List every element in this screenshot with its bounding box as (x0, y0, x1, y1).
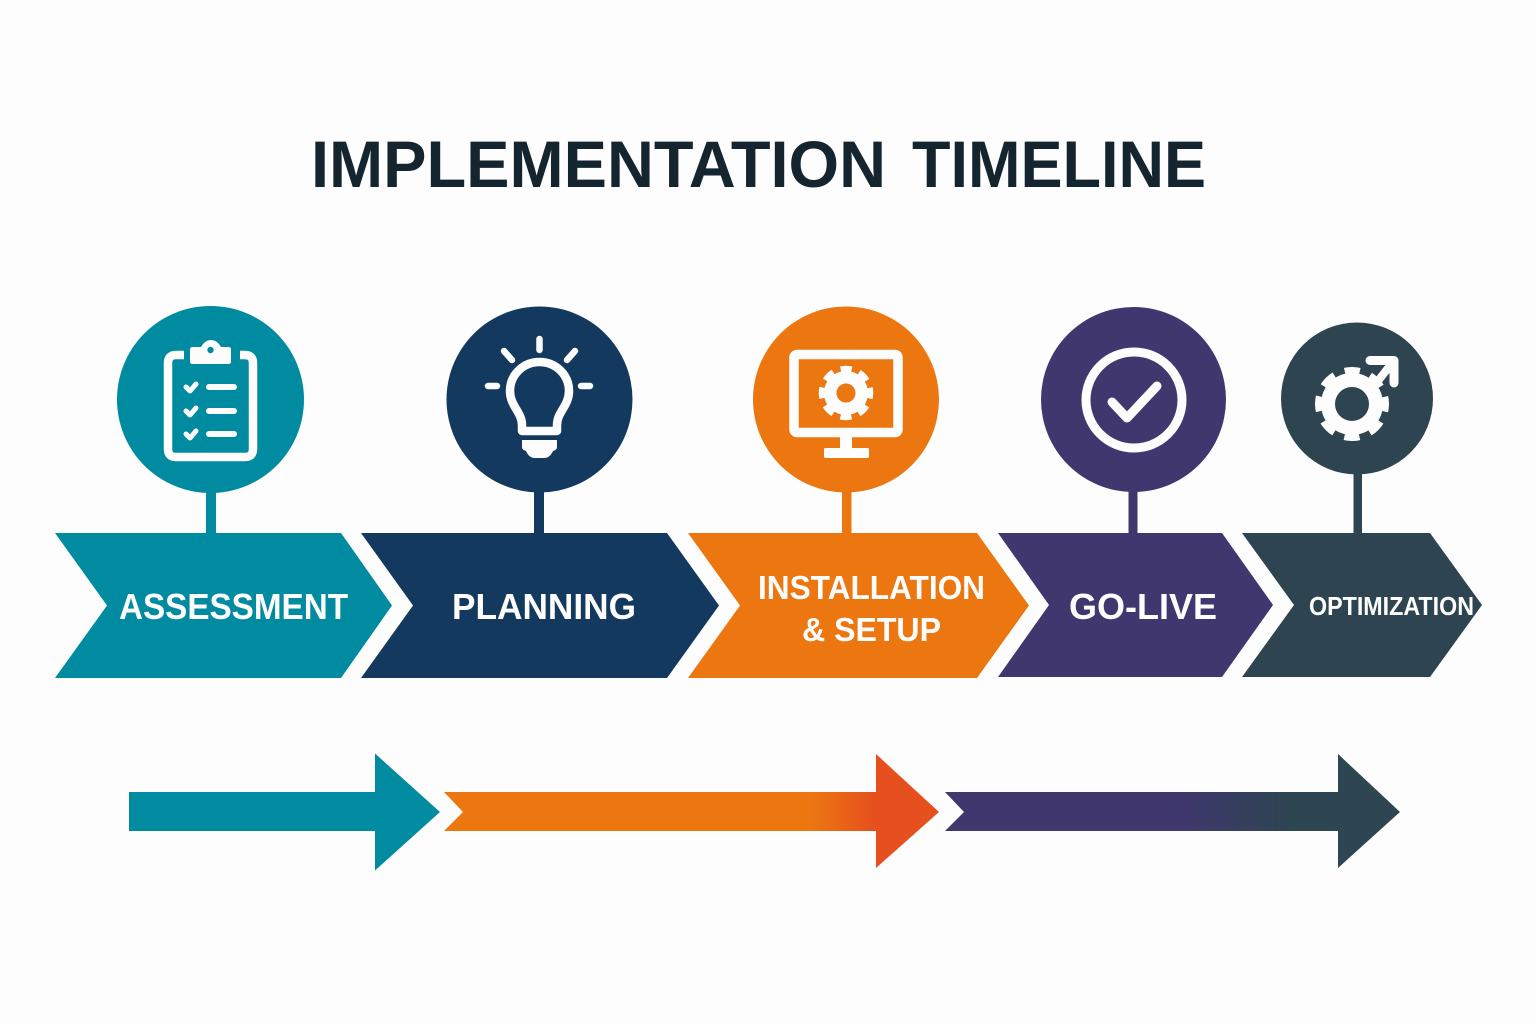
step 2: planning (361, 306, 719, 678)
arrow: orange phase (444, 754, 939, 868)
icon: light bulb (488, 339, 590, 458)
step 5: optimization (1242, 322, 1482, 677)
label: planning: PLANNING (452, 586, 636, 627)
chevron: planning (361, 533, 719, 678)
icon: gear with arrow (1319, 360, 1394, 437)
arrow: purple phase (945, 754, 1400, 868)
chevron: assessment (55, 533, 392, 678)
chevron: installation (688, 533, 1029, 678)
chevron: optimization (1242, 533, 1482, 677)
icon: check in circle (1086, 352, 1182, 448)
arrow: teal phase (129, 754, 440, 870)
chevron: go-live (998, 533, 1273, 677)
step 1: assessment (55, 306, 392, 678)
title: TIMELINE (912, 127, 1206, 201)
circle: assessment (117, 306, 304, 493)
label: assessment: ASSESSMENT (119, 586, 348, 627)
circle: installation (753, 306, 939, 492)
connector stem: installation (842, 485, 852, 535)
label: go-live: GO-LIVE (1069, 586, 1217, 627)
label: setup: & SETUP (802, 612, 941, 649)
icon: clipboard checklist (168, 340, 253, 457)
label: optimization: OPTIMIZATION (1309, 593, 1474, 621)
connector stem: assessment (206, 485, 216, 535)
circle: go-live (1041, 307, 1226, 492)
step 4: go-live (998, 307, 1273, 677)
circle: optimization (1281, 322, 1433, 474)
title: IMPLEMENTATION (311, 127, 886, 201)
circle: planning (446, 306, 632, 492)
icon: monitor with gear (794, 354, 898, 458)
connector stem: planning (534, 485, 544, 535)
step 3: installation and setup (688, 306, 1029, 678)
connector stem: optimization (1354, 470, 1362, 535)
connector stem: go-live (1128, 485, 1138, 535)
title (311, 127, 1206, 201)
label: installation: INSTALLATION (758, 570, 985, 607)
